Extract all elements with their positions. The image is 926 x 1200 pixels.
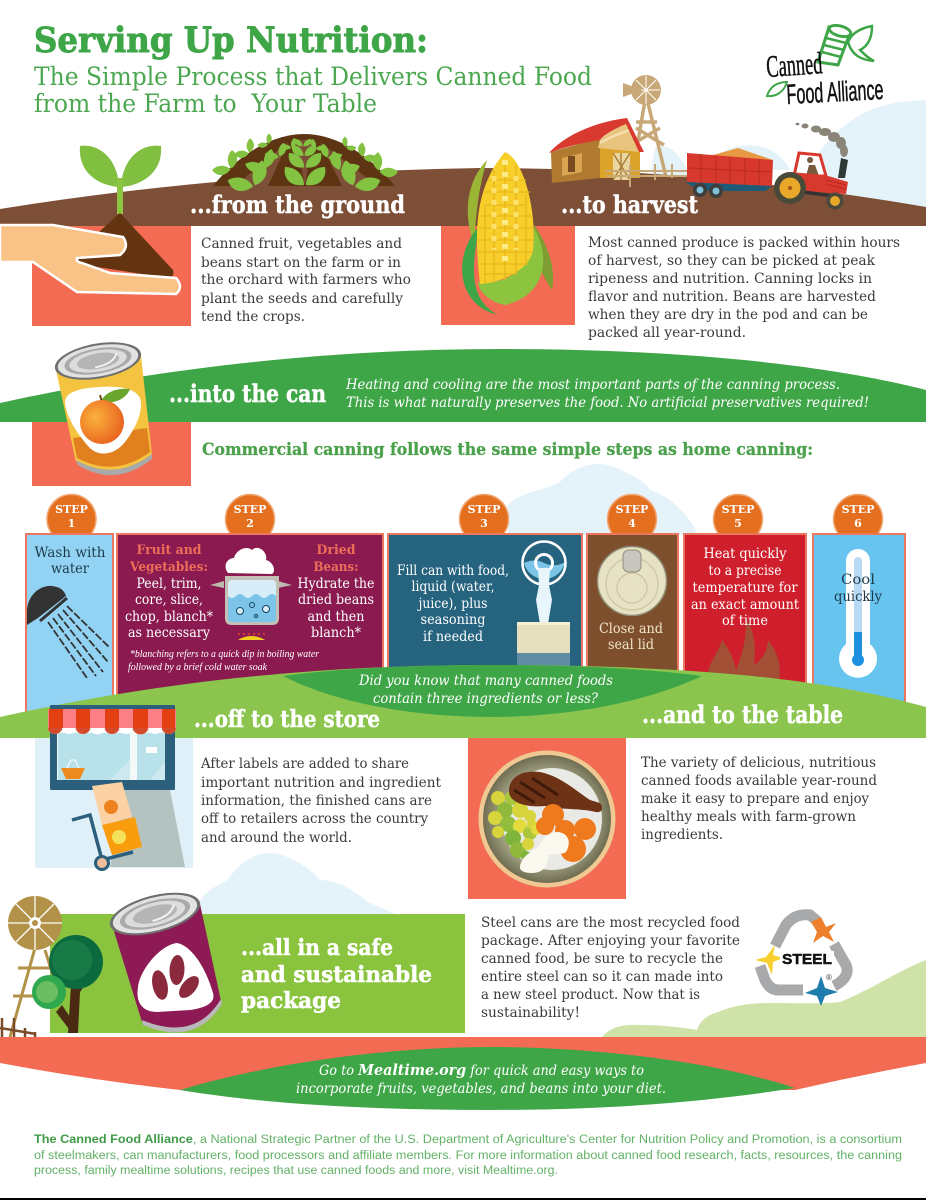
panel: step 5 heat: of time: [722, 613, 768, 629]
icon: storefront and dolly: [48, 705, 185, 870]
step badge labels: 5: [734, 517, 742, 530]
step badge labels: 3: [480, 517, 488, 530]
step badge labels: STEP: [468, 503, 500, 516]
callout: Mealtime.org: Go to Mealtime.org for quick and easy ways to: [319, 1061, 644, 1079]
panel: step 3 fill: Fill can with food,: [397, 563, 509, 579]
text: canning intro: Heating and cooling are the most important parts of the canning process.: [345, 377, 840, 393]
heading: from the ground: ...from the ground: [190, 190, 405, 219]
panel: step 3 fill: seasoning: [420, 612, 486, 628]
panel: step 2 prepare: [117, 534, 383, 714]
title: The Simple Process that Delivers Canned Food: [34, 62, 592, 91]
logo: Canned Food Alliance: Canned: [765, 45, 824, 84]
icon: bean can: [106, 885, 222, 1032]
step badge labels: 6: [854, 517, 862, 530]
text: to harvest: packed all year-round.: [588, 325, 746, 341]
panel: step 2 prepare: as necessary: [128, 625, 210, 641]
panel: step 4 seal: Close and: [599, 621, 663, 637]
background hill: light green: [602, 960, 926, 1037]
text: from the ground: beans start on the farm or in: [201, 255, 401, 271]
icon: flames: [708, 617, 780, 686]
text: to the table: The variety of delicious, nutritious: [641, 755, 876, 771]
panel: step 4 seal: [587, 534, 678, 684]
panel: step 2 prepare: *blanching refers to a quick dip in boiling water: [130, 649, 320, 660]
step badge labels: STEP: [722, 503, 754, 516]
callout: did you know: [283, 665, 702, 717]
panel: step 1 wash: Wash with: [34, 545, 106, 561]
panel: step 1 wash: [26, 534, 113, 724]
text: steel cans: sustainability!: [481, 1005, 580, 1021]
heading: safe and sustainable package: ...all in a safe: [241, 935, 393, 961]
icon: thermometer: [839, 549, 877, 678]
heading: safe and sustainable package: and sustainable: [241, 962, 432, 988]
heading: and to the table: ...and to the table: [642, 700, 843, 729]
step badges: [47, 494, 882, 544]
icon: pouring liquid: [517, 542, 570, 667]
text: off to the store: and around the world.: [201, 830, 352, 846]
panel: step 2 prepare: Fruit and: [136, 543, 202, 558]
text: from the ground: the orchard with farmers who: [201, 272, 411, 288]
green hill: store and table: [0, 665, 926, 738]
panel: harvest square: [441, 226, 575, 325]
text: to harvest: flavor and nutrition. Beans are harvested: [588, 289, 876, 305]
panel: step 6 cool: Cool: [841, 572, 875, 588]
crop rows mound: [212, 133, 398, 196]
logo: Canned Food Alliance: [765, 23, 884, 110]
icon: corn: [462, 152, 553, 315]
panel: step 2 prepare: chop, blanch*: [125, 609, 213, 625]
panel: step 6 cool: quickly: [834, 589, 882, 605]
text: to harvest: of harvest, so they can be picked at peak: [588, 253, 876, 269]
title: Serving Up Nutrition:: [34, 20, 428, 61]
title: from the Farm to Your Table: [34, 89, 377, 118]
step badge labels: 1: [68, 517, 75, 530]
step badge labels: STEP: [842, 503, 874, 516]
icon: steel recycle logo: STEEL: [782, 952, 832, 968]
footer text: of steelmakers, can manufacturers, food processors and affiliate members. For more information about canned food research, facts, resources, the canning: [34, 1150, 902, 1162]
step badge labels: [55, 503, 874, 530]
footer text: The Canned Food Alliance , a National Strategic Partner of the U.S. Department of Agriculture's Center for Nutrition Policy and Promotion, is a consortium: [34, 1134, 902, 1146]
salmon band: [0, 1037, 926, 1090]
panel: step 2 prepare: dried beans: [298, 592, 374, 608]
icon: can lid: [598, 546, 666, 616]
step badge labels: STEP: [55, 503, 88, 516]
heading: to harvest: ...to harvest: [561, 190, 698, 219]
panel: step 2 prepare: followed by a brief cold water soak: [128, 662, 267, 673]
icon: steel recycle logo: [755, 915, 847, 1006]
text: off to the store: [200, 756, 442, 846]
text: off to the store: off to retailers across the country: [201, 811, 428, 827]
heading: safe and sustainable package: [241, 935, 432, 1014]
panel: sustainable package: [50, 914, 465, 1033]
heading: into the can: ...into the can: [169, 379, 326, 408]
heading: safe and sustainable package: package: [241, 988, 341, 1014]
text: canning intro: [345, 377, 869, 411]
panel: step 2 prepare: Dried: [316, 543, 356, 558]
panel: step 3 fill: [388, 534, 582, 684]
green band: into the can: [0, 349, 926, 422]
panel: step 5 heat: temperature for: [692, 580, 798, 596]
trailer: [685, 148, 773, 198]
panel: from the ground square: [32, 226, 191, 326]
text: to harvest: [588, 235, 900, 341]
text: steel cans: canned food, be sure to recycle the: [481, 951, 723, 967]
text: steel cans: entire steel can so it can made into: [481, 969, 723, 985]
panel: plate square: [468, 738, 626, 899]
text: to harvest: Most canned produce is packed within hours: [588, 235, 900, 251]
panel: step 1 wash: water: [51, 561, 90, 577]
footer text: [34, 1134, 902, 1177]
step badge labels: STEP: [616, 503, 648, 516]
text: off to the store: information, the finished cans are: [201, 793, 432, 809]
panel: step 3 fill: juice), plus: [417, 596, 488, 612]
text: to harvest: when they are dry in the pod and can be: [588, 307, 868, 323]
text: from the ground: Canned fruit, vegetables and: [201, 236, 402, 252]
text: to harvest: ripeness and nutrition. Canning locks in: [588, 271, 872, 287]
callout: Mealtime.org: incorporate fruits, vegetables, and beans into your diet.: [296, 1081, 666, 1097]
panel: step 6 cool: [813, 534, 905, 714]
footer text: process, family mealtime solutions, recipes that use canned foods and more, visit Mealtime.org.: [34, 1165, 558, 1177]
panel: step 2 prepare: Hydrate the: [298, 576, 375, 592]
panel: store square: [35, 738, 193, 868]
text: steel cans: Steel cans are the most recycled food: [481, 915, 740, 931]
text: steel cans: [481, 915, 740, 1021]
panel: step 2 prepare: core, slice,: [135, 592, 203, 608]
icon: basket: [61, 768, 85, 779]
panel: step 2 prepare: Beans:: [314, 560, 358, 575]
panel: step 4 seal: seal lid: [608, 637, 654, 653]
icon: shower head: [27, 586, 110, 678]
step badge labels: 4: [628, 517, 636, 530]
text: to the table: [641, 755, 877, 843]
panel: step 5 heat: [684, 534, 806, 689]
panel: step 2 prepare: Vegetables:: [129, 560, 208, 575]
callout: did you know: contain three ingredients or less?: [373, 691, 599, 707]
icon: steel recycle logo: ®: [826, 973, 832, 982]
panel: step 3 fill: liquid (water,: [412, 579, 494, 595]
panel: step 2 prepare: and then: [308, 609, 365, 625]
text: from the ground: plant the seeds and carefully: [201, 291, 403, 307]
text: steel cans: a new steel product. Now that is: [481, 987, 700, 1003]
icon: windmill and tree: [0, 896, 103, 1037]
tractor: [774, 123, 848, 210]
callout: did you know: Did you know that many canned foods: [358, 673, 613, 689]
text: steel cans: package. After enjoying your favorite: [481, 933, 740, 949]
icon: boiling pot: [210, 548, 292, 640]
panel: step 3 fill: if needed: [423, 629, 483, 645]
text: to the table: healthy meals with farm-grown: [641, 809, 856, 825]
text: canning intro: This is what naturally preserves the food. No artificial preservatives required!: [346, 395, 869, 411]
icon: peach can: [52, 336, 152, 475]
title: [34, 20, 592, 118]
panel: step 5 heat: to a precise: [708, 563, 782, 579]
heading: commercial canning: Commercial canning follows the same simple steps as home canning:: [202, 440, 813, 459]
heading: off to the store: ...off to the store: [194, 706, 380, 733]
text: from the ground: [201, 236, 411, 325]
panel: can square: [32, 422, 191, 486]
background clouds: [196, 100, 926, 914]
text: to the table: canned foods available year-round: [641, 773, 877, 789]
icon: dinner plate: [478, 750, 616, 888]
panel: step 2 prepare: blanch*: [311, 625, 361, 641]
panel: step 5 heat: Heat quickly: [704, 546, 787, 562]
panel: step 2 prepare: Peel, trim,: [136, 576, 202, 592]
text: off to the store: important nutrition and ingredient: [201, 775, 442, 791]
panel: step 5 heat: an exact amount: [691, 597, 800, 613]
text: off to the store: After labels are added to share: [200, 756, 409, 772]
barn: [549, 118, 687, 187]
step badge labels: STEP: [234, 503, 266, 516]
text: to the table: make it easy to prepare and enjoy: [641, 791, 869, 807]
text: from the ground: tend the crops.: [201, 309, 305, 325]
icon: sprout in hand: [0, 146, 180, 294]
brown hill: [0, 168, 926, 226]
text: to the table: ingredients.: [641, 827, 723, 843]
windmill: farm: [623, 75, 668, 187]
callout: Mealtime.org: [180, 1047, 795, 1110]
step badge labels: 2: [246, 517, 254, 530]
